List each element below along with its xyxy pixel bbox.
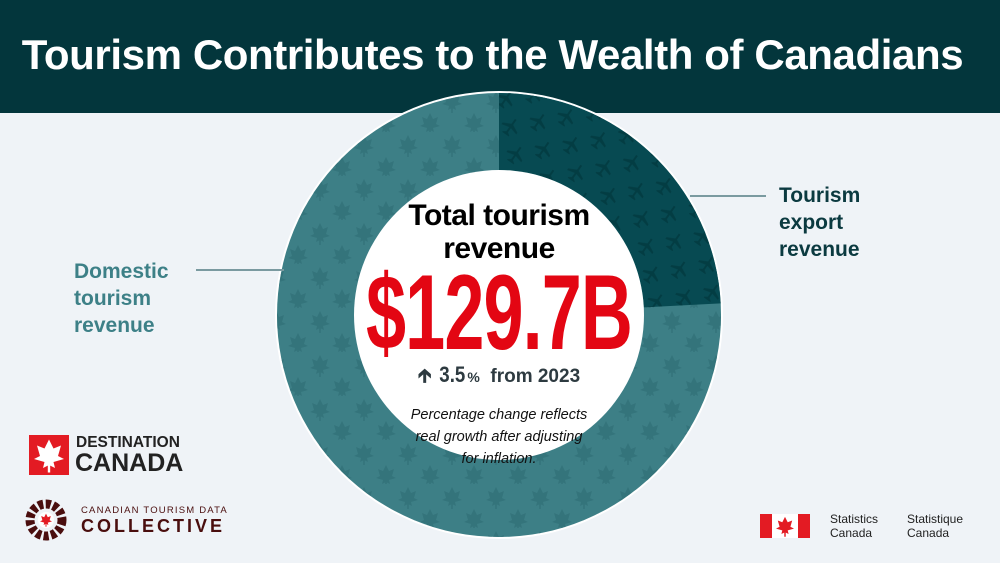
note: real growth after adjusting — [416, 429, 582, 445]
logo: Statistics Canada: Statistique — [907, 512, 963, 526]
label export: export — [779, 211, 843, 234]
connector line export — [690, 195, 766, 197]
note — [411, 407, 587, 467]
big number: $129.7B — [366, 253, 632, 372]
center heading: Total tourism revenue — [408, 199, 590, 265]
domestic segment — [277, 93, 721, 537]
label export — [779, 184, 860, 261]
label export: revenue — [779, 238, 860, 261]
logo: Statistics Canada: Canada — [830, 526, 872, 540]
note: for inflation. — [462, 451, 536, 467]
label domestic: Domestic — [74, 260, 169, 283]
label domestic: revenue — [74, 314, 155, 337]
logo: Statistics Canada: Canada — [907, 526, 949, 540]
label export: Tourism — [779, 184, 860, 207]
header bar — [0, 0, 1000, 113]
logo: Canadian Tourism Data Collective: CANADIAN TOURISM DATA — [81, 505, 228, 516]
connector line domestic — [196, 269, 284, 271]
growth: 🡱 % from 2023 — [418, 366, 580, 387]
label domestic — [74, 260, 169, 337]
logo: Canadian Tourism Data Collective — [26, 500, 228, 540]
logo: Statistics Canada — [760, 512, 963, 540]
logo: Destination Canada: CANADA — [75, 449, 183, 477]
growth: 3.5 — [439, 362, 465, 387]
logo: Canadian Tourism Data Collective: COLLECTIVE — [81, 516, 225, 536]
export segment — [499, 93, 721, 307]
logo: Statistics Canada: Statistics — [830, 512, 878, 526]
logo: Destination Canada — [29, 434, 183, 477]
note: Percentage change reflects — [411, 407, 587, 423]
title: Tourism Contributes to the Wealth of Canadians — [22, 31, 963, 78]
label domestic: tourism — [74, 287, 151, 310]
logo: Destination Canada: DESTINATION — [76, 434, 180, 451]
